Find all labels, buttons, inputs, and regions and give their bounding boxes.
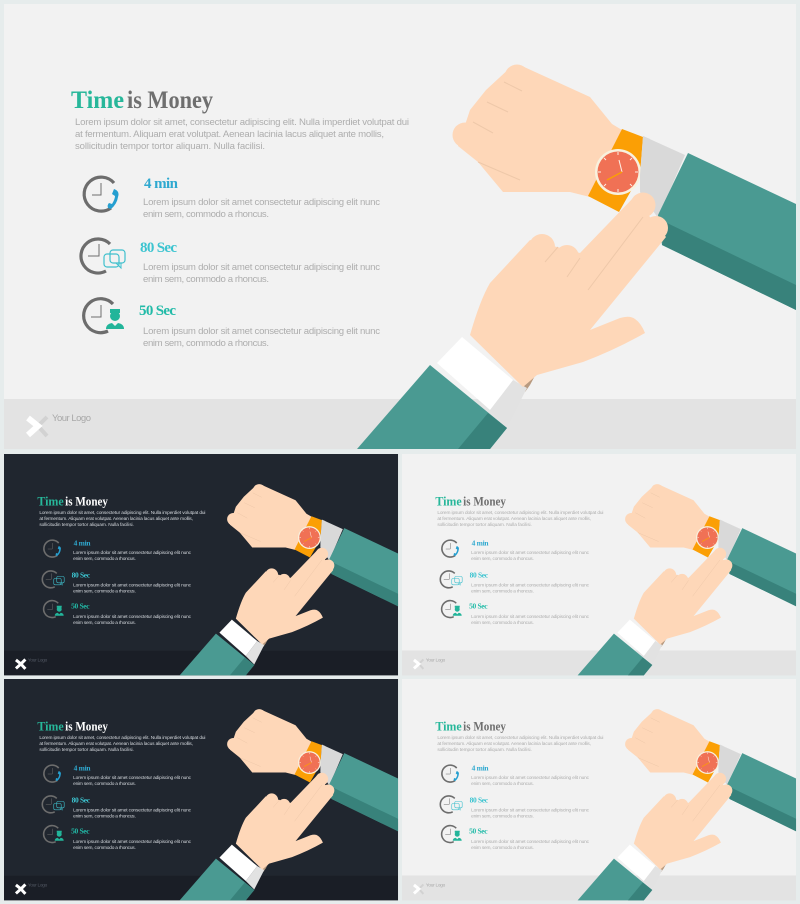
panel: dark slide top (4, 454, 398, 675)
panel: light slide top: Lorem ipsum dolor sit amet consectetur adipiscing elit nunc (471, 614, 590, 620)
panel: dark slide bottom: 50 Sec (71, 827, 90, 836)
text block 3: Lorem ipsum dolor sit amet consectetur adipiscing elit nunc (143, 326, 380, 337)
panel: light slide top (402, 454, 796, 675)
panel: main light slide (4, 4, 796, 449)
panel: dark slide bottom (4, 679, 398, 900)
panel: light slide top: 80 Sec (470, 570, 489, 579)
panel: light slide top: enim sem, commodo a rhoncus. (471, 556, 534, 562)
panel: light slide top: Lorem ipsum dolor sit amet consectetur adipiscing elit nunc (471, 582, 590, 588)
panel: dark slide top: sollicitudin tempor tortor aliquam. Nulla facilisi. (39, 522, 134, 528)
icon: clock with person (84, 299, 124, 333)
panel: light slide bottom: Lorem ipsum dolor sit amet consectetur adipiscing elit nunc (471, 775, 590, 781)
panel: dark slide top: at fermentum. Aliquam erat volutpat. Aenean lacinia lacus aliquet ante mollis, (39, 516, 193, 522)
intro text: sollicitudin tempor tortor aliquam. Nulla facilisi. (75, 141, 265, 152)
panel: light slide bottom: Lorem ipsum dolor sit amet, consectetur adipiscing elit. Nulla imperdiet volutpat dui (437, 735, 603, 741)
panel: dark slide bottom: Lorem ipsum dolor sit amet consectetur adipiscing elit nunc (73, 839, 192, 845)
panel: dark slide top: enim sem, commodo a rhoncus. (73, 620, 136, 626)
panel: dark slide bottom: sollicitudin tempor tortor aliquam. Nulla facilisi. (39, 747, 134, 753)
panel: dark slide top: is Money (65, 495, 109, 509)
panel: light slide bottom: 50 Sec (469, 827, 488, 836)
text block 1: Lorem ipsum dolor sit amet consectetur adipiscing elit nunc (143, 197, 380, 208)
text block 1 (143, 197, 380, 220)
panel: light slide bottom: Your Logo (426, 882, 446, 888)
logo text: Your Logo (52, 413, 91, 424)
panel: dark slide top: 80 Sec (72, 570, 91, 579)
panel: dark slide top: Your Logo (28, 657, 48, 663)
icon: clock with chat (81, 239, 125, 273)
panel: dark slide top: Lorem ipsum dolor sit amet consectetur adipiscing elit nunc (73, 550, 192, 556)
panel: light slide top: enim sem, commodo a rhoncus. (471, 588, 534, 594)
panel: light slide bottom: Lorem ipsum dolor sit amet consectetur adipiscing elit nunc (471, 807, 590, 813)
panel: light slide bottom: is Money (463, 720, 507, 734)
text block 2: enim sem, commodo a rhoncus. (143, 274, 269, 285)
panel: light slide top: Your Logo (426, 657, 446, 663)
panel: light slide top: at fermentum. Aliquam erat volutpat. Aenean lacinia lacus aliquet ante mollis, (437, 516, 591, 522)
panel: dark slide top: enim sem, commodo a rhoncus. (73, 588, 136, 594)
footer band (4, 399, 796, 449)
panel: dark slide bottom: 80 Sec (72, 795, 91, 804)
panel: light slide bottom: enim sem, commodo a rhoncus. (471, 813, 534, 819)
panel: dark slide bottom: enim sem, commodo a rhoncus. (73, 781, 136, 787)
panel: dark slide top: Lorem ipsum dolor sit amet consectetur adipiscing elit nunc (73, 582, 192, 588)
icon: clock with phone (84, 177, 118, 211)
panel: light slide top: 4 min (472, 539, 489, 548)
text block 3: enim sem, commodo a rhoncus. (143, 338, 269, 349)
panel: dark slide top: Time (37, 495, 64, 509)
panel: dark slide bottom: enim sem, commodo a rhoncus. (73, 813, 136, 819)
panel: light slide bottom: sollicitudin tempor tortor aliquam. Nulla facilisi. (437, 747, 532, 753)
panel: light slide bottom: Lorem ipsum dolor sit amet consectetur adipiscing elit nunc (471, 839, 590, 845)
text block 3 (143, 326, 380, 349)
panel: light slide bottom (402, 679, 796, 900)
slide background (4, 4, 796, 399)
text block 1: enim sem, commodo a rhoncus. (143, 209, 269, 220)
panel: light slide bottom: 4 min (472, 764, 489, 773)
panel: dark slide top: 50 Sec (71, 602, 90, 611)
title: is Money (127, 87, 213, 114)
heading: 80 Sec: 80 Sec (140, 240, 177, 256)
panel: dark slide bottom: enim sem, commodo a rhoncus. (73, 845, 136, 851)
intro text: at fermentum. Aliquam erat volutpat. Aenean lacinia lacus aliquet ante mollis, (75, 129, 384, 140)
panel: dark slide top: 4 min (74, 539, 91, 548)
title: Time (71, 87, 124, 114)
text block 2 (143, 262, 380, 285)
illustration: hands and watch (357, 64, 796, 449)
panel: light slide bottom: 80 Sec (470, 795, 489, 804)
panel: dark slide bottom: at fermentum. Aliquam erat volutpat. Aenean lacinia lacus aliquet ante mollis, (39, 741, 193, 747)
panel: light slide top: sollicitudin tempor tortor aliquam. Nulla facilisi. (437, 522, 532, 528)
panel: light slide bottom: Time (435, 720, 462, 734)
intro text (75, 117, 409, 152)
panel: dark slide top: Lorem ipsum dolor sit amet consectetur adipiscing elit nunc (73, 614, 192, 620)
panel: dark slide bottom: Your Logo (28, 882, 48, 888)
text block 2: Lorem ipsum dolor sit amet consectetur adipiscing elit nunc (143, 262, 380, 273)
heading: 50 Sec: 50 Sec (139, 303, 176, 319)
panel: light slide bottom: enim sem, commodo a rhoncus. (471, 845, 534, 851)
panel: dark slide bottom: 4 min (74, 764, 91, 773)
panel: light slide top: Lorem ipsum dolor sit amet, consectetur adipiscing elit. Nulla imperdiet volutpat dui (437, 510, 603, 516)
panel: dark slide bottom: Lorem ipsum dolor sit amet consectetur adipiscing elit nunc (73, 775, 192, 781)
panel: light slide top: is Money (463, 495, 507, 509)
panel: light slide top: Lorem ipsum dolor sit amet consectetur adipiscing elit nunc (471, 550, 590, 556)
panel: light slide top: enim sem, commodo a rhoncus. (471, 620, 534, 626)
panel: dark slide top: enim sem, commodo a rhoncus. (73, 556, 136, 562)
panel: dark slide bottom: Lorem ipsum dolor sit amet consectetur adipiscing elit nunc (73, 807, 192, 813)
intro text: Lorem ipsum dolor sit amet, consectetur adipiscing elit. Nulla imperdiet volutpat dui (75, 117, 409, 128)
heading: 4 min: 4 min (144, 176, 179, 192)
panel: light slide bottom: at fermentum. Aliquam erat volutpat. Aenean lacinia lacus aliquet ante mollis, (437, 741, 591, 747)
panel: light slide top: Time (435, 495, 462, 509)
title (71, 87, 213, 114)
panel: dark slide bottom: Time (37, 720, 64, 734)
panel: light slide top: 50 Sec (469, 602, 488, 611)
logo mark (28, 417, 47, 436)
panel: dark slide bottom: Lorem ipsum dolor sit amet, consectetur adipiscing elit. Nulla imperdiet volutpat dui (39, 735, 205, 741)
panel: dark slide bottom: is Money (65, 720, 109, 734)
panel: dark slide top: Lorem ipsum dolor sit amet, consectetur adipiscing elit. Nulla imperdiet volutpat dui (39, 510, 205, 516)
panel: light slide bottom: enim sem, commodo a rhoncus. (471, 781, 534, 787)
